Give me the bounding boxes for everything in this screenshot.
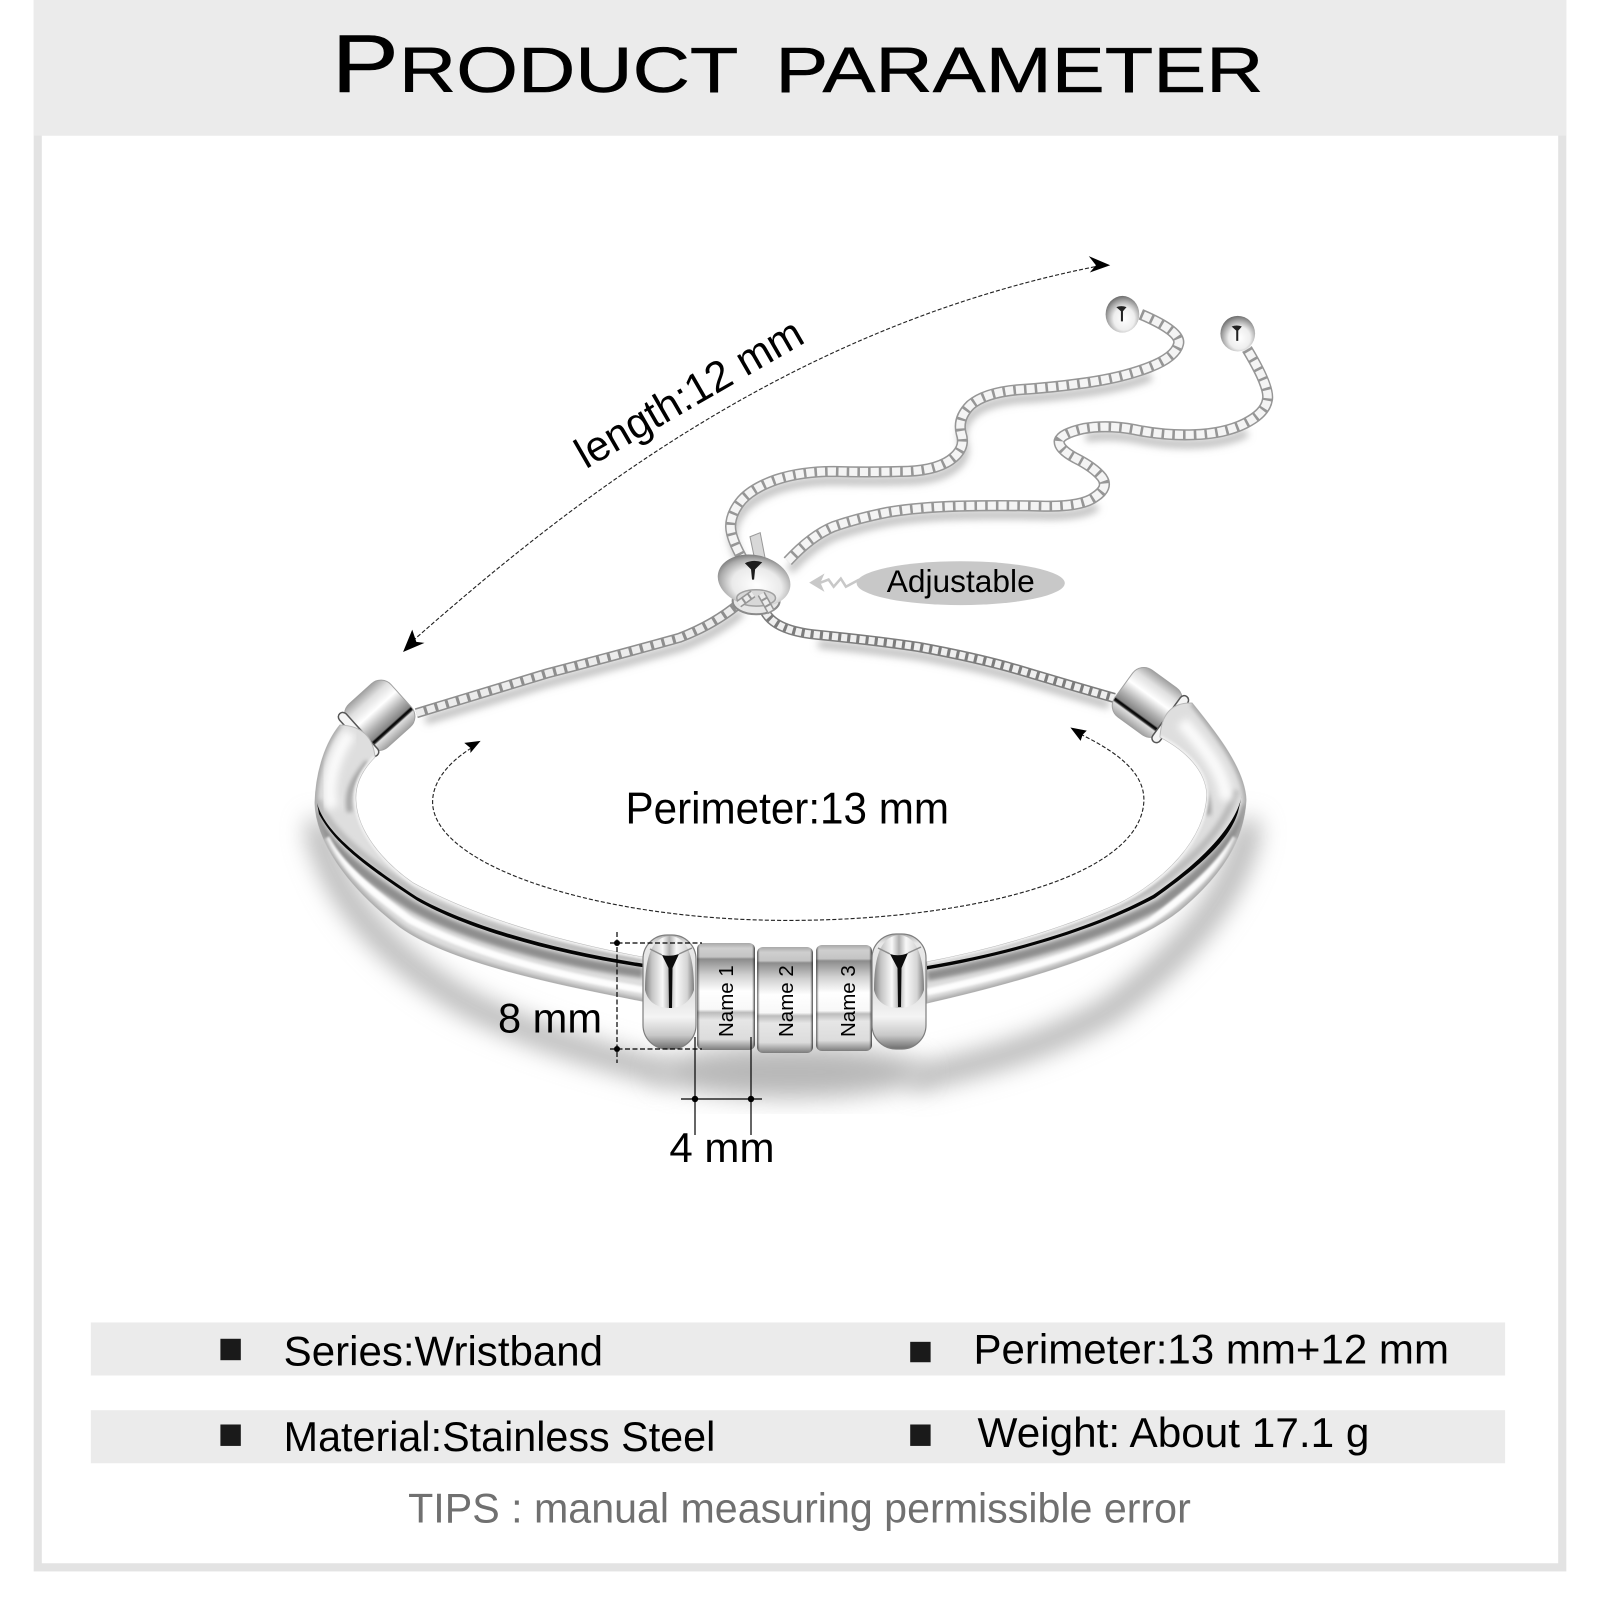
bead: name 2 bbox=[757, 947, 813, 1053]
right end cap bbox=[1107, 662, 1191, 745]
spec row 1 bbox=[91, 1322, 1505, 1376]
4 mm label: 4 mm bbox=[669, 1124, 774, 1171]
spec row 2 bbox=[91, 1409, 1505, 1463]
title: PRODUCT PARAMETER bbox=[332, 19, 1263, 110]
header band bbox=[34, 0, 1566, 136]
bracelet illustration bbox=[314, 296, 1268, 1135]
spec row 2: Material:Stainless Steel bbox=[284, 1413, 715, 1460]
8 mm label: 8 mm bbox=[498, 995, 602, 1042]
bangle and beads, drawn in source pixels bbox=[314, 662, 1248, 1135]
bangle right arm bbox=[927, 703, 1248, 1003]
bead: name 3: Name 3 bbox=[837, 965, 860, 1037]
tips note: TIPS : manual measuring permissible error bbox=[408, 1484, 1191, 1531]
spec row 1: Perimeter:13 mm+12 mm bbox=[973, 1325, 1449, 1372]
bangle cast shadows bbox=[318, 830, 1248, 1098]
chain to right cap bbox=[765, 612, 1114, 698]
dimension lines: 4 mm width bbox=[681, 1037, 762, 1135]
bead: name 1: Name 1 bbox=[715, 965, 738, 1037]
right rondelle bead bbox=[872, 934, 926, 1049]
length arrow bbox=[403, 256, 1110, 652]
adjustable chain: lower strand bbox=[788, 349, 1268, 561]
adjustable chain: upper strand bbox=[731, 314, 1179, 571]
bead: name 3 bbox=[816, 945, 872, 1051]
spec row 2: Weight: About 17.1 g bbox=[978, 1409, 1369, 1456]
chain shadows bbox=[426, 377, 1247, 720]
bead: name 2: Name 2 bbox=[775, 965, 798, 1037]
spec row 1: Series:Wristband bbox=[284, 1327, 603, 1374]
bead: name 1 bbox=[697, 943, 755, 1050]
left rondelle bead bbox=[643, 935, 696, 1049]
adjustable callout: Adjustable bbox=[887, 563, 1035, 599]
left end cap bbox=[336, 674, 421, 759]
chain end ball 2 bbox=[1220, 316, 1255, 352]
length label: length:12 mm bbox=[567, 309, 812, 478]
perimeter label: Perimeter:13 mm bbox=[626, 784, 949, 833]
perimeter arrow bbox=[433, 728, 1144, 920]
chain end ball 1 bbox=[1106, 296, 1139, 333]
sliding clasp bbox=[713, 533, 795, 614]
dimension lines: 8 mm height bbox=[610, 932, 702, 1063]
bangle left arm bbox=[314, 725, 650, 1002]
chain to left cap bbox=[416, 603, 740, 713]
adjustable callout bbox=[809, 561, 1065, 605]
